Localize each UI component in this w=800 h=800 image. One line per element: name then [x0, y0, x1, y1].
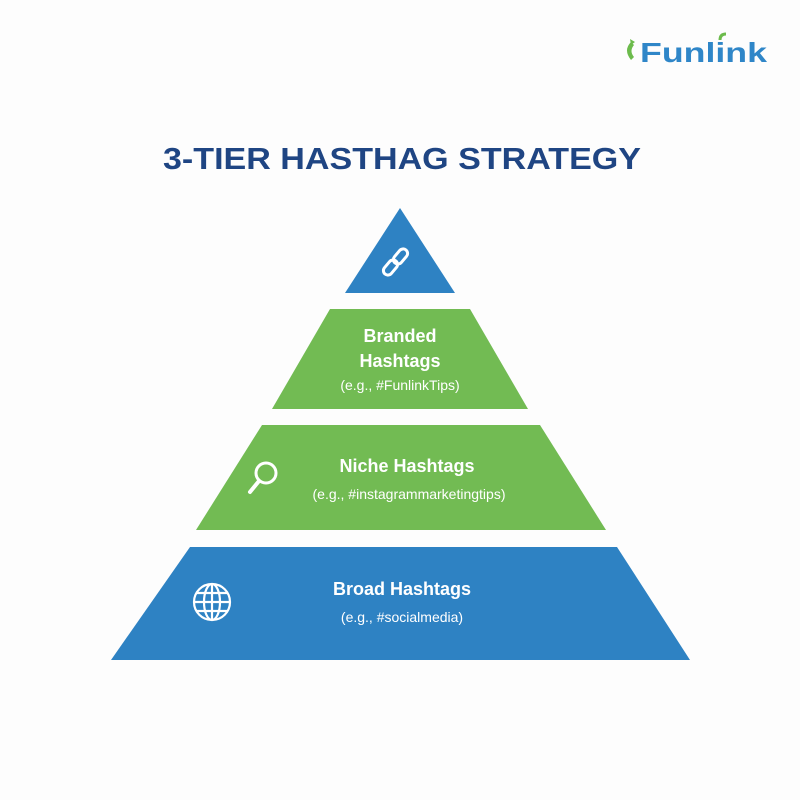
pyramid tier: niche hashtags: Niche Hashtags — [339, 456, 475, 476]
title: 3-TIER HASTHAG STRATEGY — [163, 141, 641, 176]
pyramid tier: branded hashtags — [272, 309, 528, 409]
pyramid tier: broad hashtags — [111, 547, 690, 660]
logo: Funlink — [627, 34, 768, 68]
pyramid tier: broad hashtags: Broad Hashtags — [333, 579, 471, 599]
icon: chain link — [382, 247, 409, 277]
pyramid tier: niche hashtags — [196, 425, 606, 530]
pyramid tier: branded hashtags: (e.g., #FunlinkTips) — [340, 377, 460, 393]
logo: Funlink: Funlink — [640, 37, 768, 68]
pyramid tier: broad hashtags: (e.g., #socialmedia) — [341, 609, 463, 625]
pyramid tier: branded hashtags: Branded — [363, 326, 437, 346]
pyramid tier: niche hashtags: (e.g., #instagrammarketingtips) — [313, 486, 505, 502]
pyramid tier: branded hashtags: Hashtags — [359, 351, 441, 371]
icon: magnifier — [250, 463, 276, 492]
pyramid tier: top (link icon) — [345, 208, 455, 293]
icon: globe — [194, 584, 230, 620]
